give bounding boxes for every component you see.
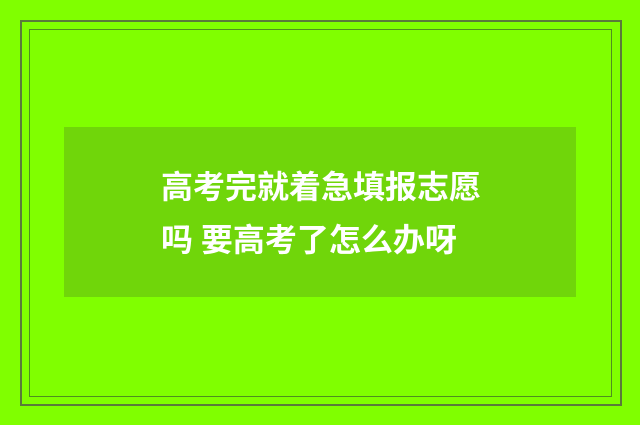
- title line 2: 吗 要高考了怎么办呀: [161, 222, 457, 258]
- title line 1: 高考完就着急填报志愿: [161, 169, 481, 205]
- title panel: [64, 127, 576, 297]
- inner border frame: [29, 29, 612, 397]
